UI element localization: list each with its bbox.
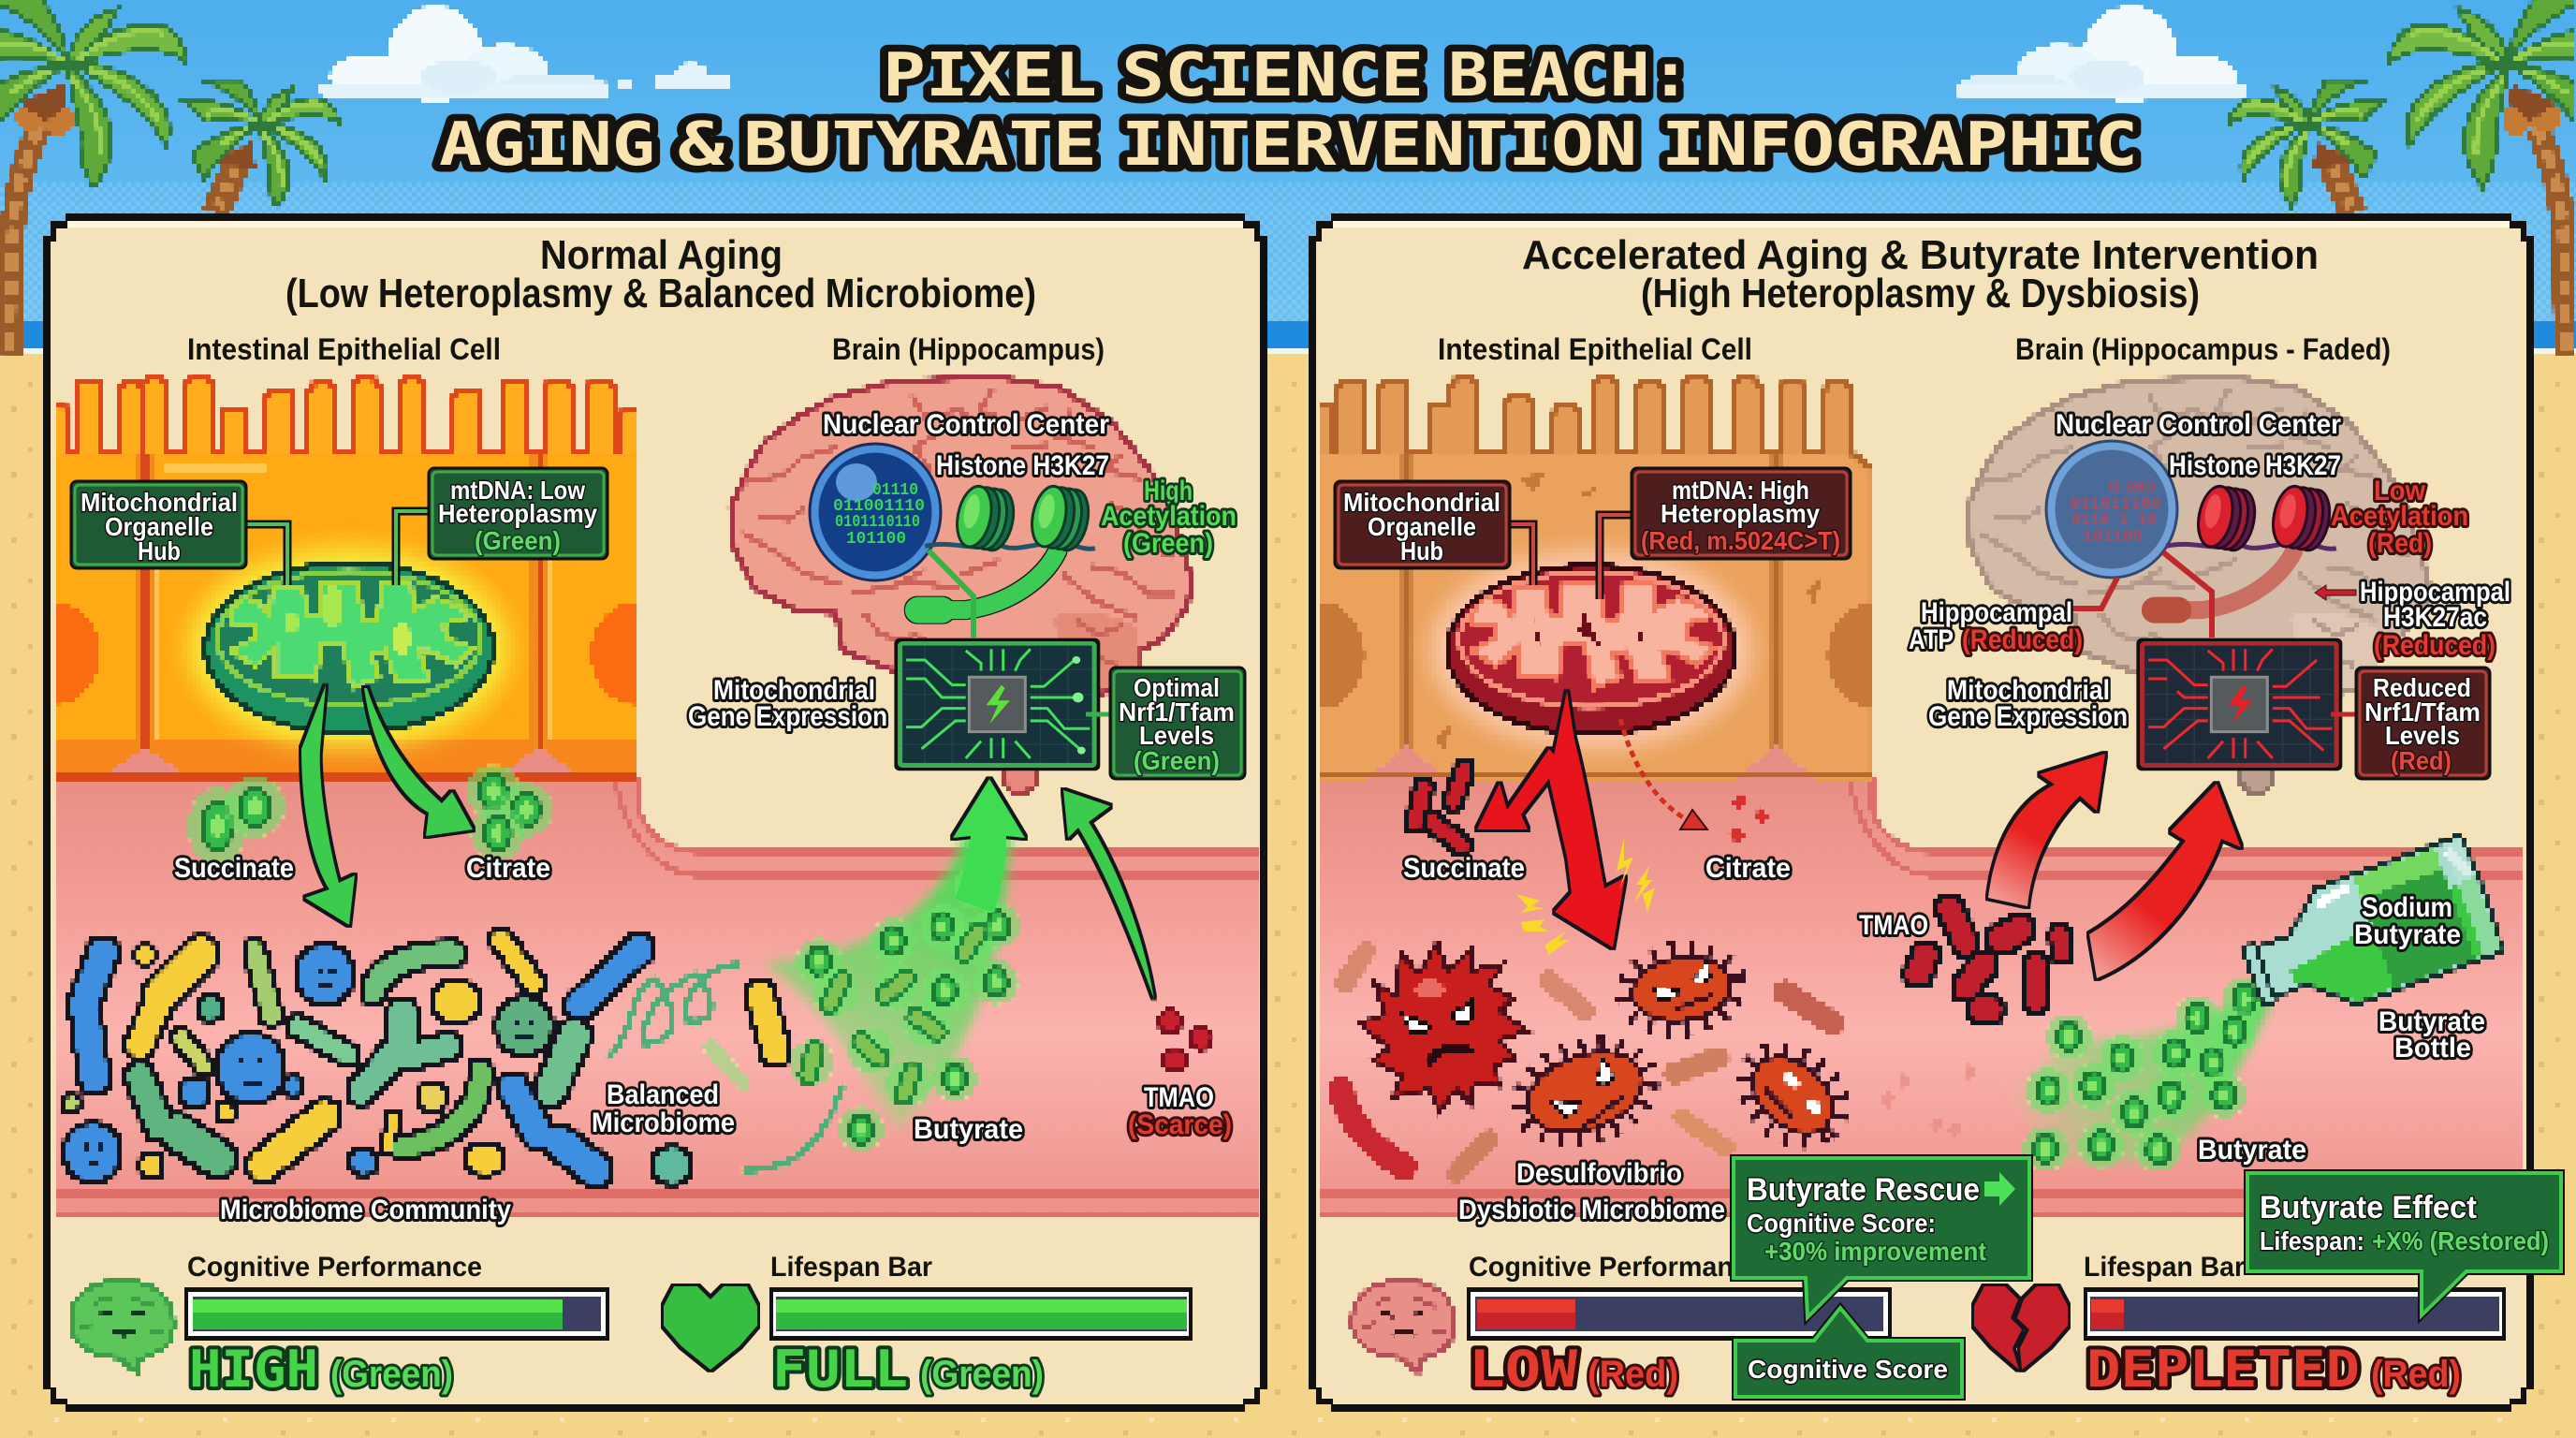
metric: lifespan: Lifespan Bar — [2084, 1252, 2245, 1283]
lumen labels: Butyrate — [2198, 1135, 2306, 1166]
callout: butyrate effect: +X% (Restored) — [2372, 1226, 2549, 1255]
box: mitochondrial organelle hub: Organelle — [1368, 512, 1476, 541]
citrate particles — [466, 765, 553, 860]
brain labels: Hippocampal — [1921, 597, 2072, 628]
desulfovibrio: spiky microbes — [1359, 941, 1861, 1158]
panel heading: Normal Aging — [540, 232, 783, 278]
lumen labels: Citrate — [466, 853, 550, 884]
metric: cognitive performance — [71, 1252, 609, 1399]
box: optimal Nrf1/Tfam levels: Optimal — [1134, 673, 1220, 702]
box: mtDNA low heteroplasmy — [396, 468, 607, 585]
title — [439, 41, 2138, 180]
arrow: mitochondrion to succinate — [1477, 749, 1561, 829]
chip: reduced gene expression — [2136, 638, 2342, 770]
lumen labels: Desulfovibrio — [1516, 1158, 1682, 1189]
arrow: mitochondrion to citrate — [364, 688, 473, 836]
binary code in faded nucleus: 0110 1 10 — [2071, 511, 2157, 530]
metric: cognitive performance — [1353, 1252, 1892, 1399]
box: mitochondrial organelle hub: Hub — [138, 536, 181, 565]
palm: large right — [2390, 0, 2576, 354]
callout: cognitive score — [1735, 1308, 1962, 1397]
dysbiotic microbes: faded rods — [1341, 952, 1834, 1173]
lumen labels: Dysbiotic Microbiome — [1458, 1195, 1725, 1225]
icon: green arrow — [1984, 1172, 2015, 1206]
brain labels: Acetylation — [1101, 501, 1237, 532]
section heading: brain: Brain (Hippocampus) — [832, 332, 1105, 366]
box: reduced Nrf1/Tfam levels: (Red) — [2391, 746, 2452, 775]
palm: small left — [184, 81, 339, 213]
lumen labels: Sodium — [2362, 892, 2452, 923]
gut lumen — [1319, 779, 2523, 1216]
icon: broken heart — [1974, 1286, 2068, 1370]
brain labels: Acetylation — [2331, 501, 2468, 532]
box: mtDNA high heteroplasmy: Heteroplasmy — [1661, 499, 1820, 528]
mitochondrion — [190, 549, 508, 747]
angry microbe 4 — [1725, 1035, 1861, 1155]
title: INTERVENTION — [1121, 110, 1637, 180]
butyrate fan — [764, 824, 1011, 1128]
lumen labels — [1403, 853, 2485, 1225]
metric: lifespan: (Green) — [920, 1354, 1044, 1395]
icon: happy brain — [71, 1281, 173, 1372]
scenery: clouds and palm trees — [0, 0, 2576, 354]
connector: nucleus to chip — [929, 550, 973, 638]
lumen labels: TMAO — [1859, 910, 1928, 941]
box: mitochondrial organelle hub: Organelle — [105, 512, 213, 541]
angry microbe 2 — [1616, 941, 1748, 1037]
butyrate particles — [784, 865, 1020, 1152]
box: mtDNA high heteroplasmy: mtDNA: High — [1672, 476, 1809, 505]
illustrated layer: cell, gut lumen, brain, microbes — [8, 376, 1257, 1216]
intestinal epithelial cell — [8, 391, 682, 777]
binary code in nucleus — [833, 481, 925, 549]
panel heading — [285, 232, 1036, 316]
box: mtDNA high heteroplasmy — [1600, 468, 1851, 599]
damaged nucleosomes — [2166, 484, 2336, 552]
callout: butyrate effect: Butyrate Effect — [2260, 1190, 2477, 1225]
icon: sad brain — [1353, 1281, 1455, 1372]
metric: cognitive performance: Cognitive Performance — [187, 1252, 482, 1283]
brain labels: (Red) — [2368, 528, 2432, 559]
cloud left — [318, 6, 610, 103]
faded brain — [1968, 376, 2428, 793]
microbe faces — [84, 967, 534, 1167]
box: mitochondrial organelle hub: Hub — [1400, 536, 1443, 565]
icon: green heart — [664, 1286, 757, 1370]
lumen labels: Citrate — [1705, 853, 1791, 884]
callout: cognitive score: Cognitive Score — [1748, 1355, 1948, 1384]
microbes: round cells — [65, 946, 689, 1182]
metric: cognitive performance: (Green) — [330, 1354, 453, 1395]
box: mtDNA low heteroplasmy: Heteroplasmy — [438, 499, 597, 528]
faint pink debris — [1881, 1063, 1977, 1139]
butyrate stream — [2012, 971, 2270, 1161]
binary code in nucleus: 101100 — [846, 530, 906, 549]
arrows: red flows — [1477, 691, 2241, 978]
box: mitochondrial organelle hub: Mitochondrial — [80, 488, 238, 517]
brain labels: (Green) — [1123, 528, 1213, 559]
brain labels: Histone H3K27 — [936, 450, 1109, 481]
title: SCIENCE — [1121, 41, 1424, 110]
connector: nucleus to chip — [2163, 552, 2212, 638]
bottle of sodium butyrate — [2232, 834, 2506, 1034]
box: mtDNA low heteroplasmy: mtDNA: Low — [450, 476, 585, 505]
callout: butyrate rescue: Butyrate Rescue — [1747, 1172, 1980, 1208]
binary code in nucleus: 01110 — [872, 481, 918, 500]
metric: cognitive performance: Cognitive Performance — [1469, 1252, 1764, 1283]
metric: lifespan: (Red) — [2371, 1354, 2461, 1395]
lumen labels: (Scarce) — [1128, 1109, 1232, 1140]
callout: butyrate effect: Lifespan: — [2260, 1226, 2364, 1255]
brain labels: Nuclear Control Center — [823, 409, 1109, 440]
brain labels: Hippocampal — [2360, 577, 2510, 608]
microbiome community — [82, 939, 776, 1170]
brain labels: (Reduced) — [1962, 624, 2083, 655]
progress bar — [2084, 1287, 2506, 1341]
metric: cognitive performance: LOW — [1469, 1340, 1578, 1399]
box: optimal Nrf1/Tfam levels: (Green) — [1134, 746, 1220, 775]
TMAO dots — [1159, 1010, 1212, 1071]
arrow: TMAO to chip — [1063, 790, 1154, 999]
binary code in faded nucleus: 011011100 — [2070, 495, 2161, 514]
box: reduced Nrf1/Tfam levels: Levels — [2385, 721, 2460, 750]
section heading: intestinal epithelial cell: Intestinal Epithelial Cell — [1438, 332, 1752, 366]
palm: small right — [2230, 81, 2384, 213]
lumen labels: Bottle — [2394, 1033, 2471, 1064]
binary code in faded nucleus — [2070, 479, 2161, 547]
citrate fragments — [1729, 792, 1770, 844]
metric: cognitive performance: (Red) — [1588, 1354, 1678, 1395]
brain labels — [688, 409, 1237, 732]
nucleus — [810, 444, 941, 580]
arrow: butyrate to chip — [953, 779, 1025, 838]
brain labels — [1909, 409, 2510, 732]
progress bar — [184, 1287, 609, 1341]
angry microbe 3 — [1500, 1026, 1670, 1158]
binary code in faded nucleus: 01 10010 — [2109, 479, 2155, 498]
chip: mitochondrial gene expression — [894, 638, 1100, 770]
brain — [731, 376, 1192, 793]
brain labels: ATP — [1909, 624, 1954, 655]
arrow: TMAO to chip upper — [1988, 754, 2105, 906]
panel frame — [43, 213, 1267, 1412]
damaged mitochondrion — [1432, 552, 1750, 747]
panel heading: (High Heteroplasmy & Dysbiosis) — [1641, 271, 2200, 316]
brain labels: Mitochondrial — [713, 675, 875, 706]
box: reduced Nrf1/Tfam levels — [2331, 668, 2490, 779]
progress bar — [769, 1287, 1193, 1341]
gut lumen — [54, 779, 1257, 1216]
panel heading: Accelerated Aging & Butyrate Intervention — [1522, 232, 2319, 278]
hippocampus — [918, 550, 1058, 610]
box: mitochondrial organelle hub — [1335, 481, 1533, 585]
binary code in faded nucleus: 101100 — [2083, 528, 2143, 547]
lumen labels: Succinate — [174, 853, 294, 884]
title: INFOGRAPHIC — [1661, 110, 2138, 180]
panel heading: (Low Heteroplasmy & Balanced Microbiome) — [285, 271, 1036, 316]
title: AGING — [439, 110, 655, 180]
brain labels: Gene Expression — [688, 701, 887, 732]
butyrate fan neck — [955, 836, 1006, 913]
panel heading — [1522, 232, 2319, 316]
brain labels: Low — [2374, 476, 2426, 506]
brain labels: Gene Expression — [1928, 701, 2128, 732]
brain labels: Histone H3K27 — [2169, 450, 2341, 481]
progress bar — [1467, 1287, 1892, 1341]
callout: butyrate rescue: Cognitive Score: — [1747, 1209, 1936, 1238]
title: BUTYRATE — [743, 110, 1097, 180]
faded hippocampus — [2155, 550, 2294, 610]
arrow: weak flow to citrate — [1620, 719, 1707, 829]
succinate capsules — [1415, 770, 1465, 845]
box: optimal Nrf1/Tfam levels: Levels — [1139, 721, 1214, 750]
damaged intestinal cell — [1320, 374, 1872, 782]
title: BEACH: — [1448, 41, 1690, 110]
arrow: mitochondrion to dysbiotic microbes — [1549, 691, 1625, 947]
box: optimal Nrf1/Tfam levels — [1086, 668, 1245, 779]
callout: butyrate effect — [2247, 1173, 2561, 1315]
panel: accelerated aging and butyrate intervention — [1277, 213, 2561, 1412]
binary code in nucleus: 0101110110 — [835, 513, 920, 532]
box: reduced Nrf1/Tfam levels: Nrf1/Tfam — [2364, 697, 2481, 726]
box: mitochondrial organelle hub — [71, 481, 287, 585]
lumen labels: TMAO — [1144, 1082, 1214, 1113]
binary code in nucleus: 011001110 — [833, 497, 925, 516]
arrows: green flows — [301, 685, 1154, 999]
brain labels: High — [1144, 476, 1193, 506]
histone nucleosomes — [925, 484, 1095, 552]
brain labels: H3K27ac — [2383, 602, 2487, 633]
box: mtDNA high heteroplasmy: (Red, m.5024C>T) — [1641, 526, 1840, 555]
metric: lifespan — [664, 1252, 1193, 1399]
arrow: mitochondrion to microbiome — [301, 685, 355, 925]
spirochetes — [608, 964, 842, 1170]
arrow: TMAO to chip lower — [2089, 784, 2241, 978]
icon: yellow sparks — [1516, 838, 1655, 955]
brain labels: Nuclear Control Center — [2056, 409, 2341, 440]
title: PIXEL — [883, 41, 1097, 110]
lumen labels: Butyrate — [914, 1114, 1023, 1145]
section heading: intestinal epithelial cell: Intestinal Epithelial Cell — [187, 332, 501, 366]
metric: lifespan: FULL — [772, 1340, 908, 1399]
TMAO particles — [1918, 907, 2062, 1009]
box: reduced Nrf1/Tfam levels: Reduced — [2373, 673, 2471, 702]
metric: cognitive performance: HIGH — [189, 1340, 318, 1399]
brain labels: Mitochondrial — [1947, 675, 2110, 706]
lumen labels: Microbiome Community — [220, 1195, 511, 1225]
lumen labels: Succinate — [1403, 853, 1525, 884]
succinate particles — [188, 777, 285, 866]
metric: lifespan — [1974, 1252, 2506, 1399]
lumen labels: Balanced — [607, 1079, 719, 1110]
metric: lifespan: Lifespan Bar — [770, 1252, 932, 1283]
connector: hippocampal ATP — [2072, 578, 2117, 609]
box: mitochondrial organelle hub: Mitochondrial — [1343, 488, 1500, 517]
small cloud — [618, 63, 728, 88]
angry big microbe — [1359, 943, 1528, 1112]
metric: lifespan: DEPLETED — [2086, 1340, 2360, 1399]
panel: normal aging — [8, 213, 1267, 1412]
panel frame — [1309, 213, 2534, 1412]
box: optimal Nrf1/Tfam levels: Nrf1/Tfam — [1119, 697, 1235, 726]
illustrated layer: cell, lumen, brain, microbes — [1277, 376, 2523, 1216]
callout: butyrate rescue: +30% improvement — [1764, 1237, 1986, 1266]
faded nucleus — [2046, 441, 2177, 578]
lumen labels: Microbiome — [592, 1108, 735, 1138]
section heading: faded brain: Brain (Hippocampus - Faded) — [2015, 332, 2391, 366]
lumen labels: Butyrate — [2354, 919, 2461, 950]
lumen labels — [174, 853, 1232, 1225]
box: mtDNA low heteroplasmy: (Green) — [475, 526, 561, 555]
callout: butyrate rescue — [1734, 1158, 2029, 1317]
arrow: H3K27ac pointer — [2315, 585, 2356, 600]
cloud right — [1955, 6, 2247, 103]
lumen labels: Butyrate — [2378, 1006, 2485, 1037]
palm: large left — [0, 0, 186, 354]
brain labels: (Reduced) — [2374, 630, 2496, 661]
butyrate particles — [2023, 976, 2267, 1172]
title: & — [678, 110, 725, 180]
